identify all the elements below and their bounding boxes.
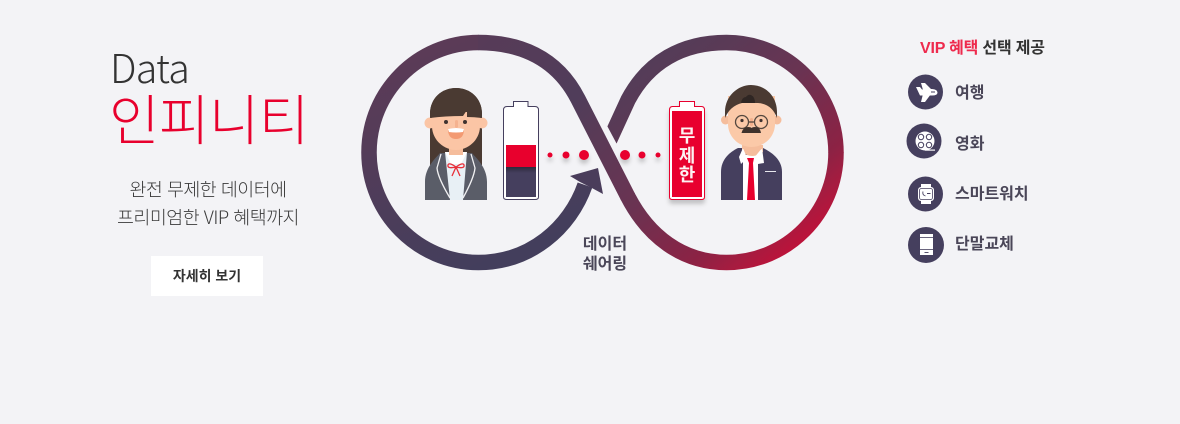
woman figure xyxy=(424,88,488,200)
jacket xyxy=(425,153,487,200)
button: 자세히 보기: 자세히 보기 xyxy=(173,268,241,284)
label: 데이터 쉐어링: 쉐어링 xyxy=(583,256,627,273)
dotted connector xyxy=(548,150,660,160)
label: 데이터 쉐어링 xyxy=(583,235,627,273)
man figure xyxy=(721,85,782,200)
battery: unlimited xyxy=(670,102,704,200)
icon: film reel xyxy=(906,124,942,158)
battery label: 무 xyxy=(679,122,695,148)
icon: smartwatch xyxy=(908,176,943,212)
arrow head xyxy=(570,168,603,194)
text block: description: 완전 무제한 데이터에 xyxy=(129,176,287,202)
battery label: 제 xyxy=(679,142,695,168)
label: 데이터 쉐어링: 데이터 xyxy=(583,236,627,253)
list label: 스마트워치: 스마트워치 xyxy=(955,186,1029,203)
text block: description xyxy=(117,176,299,230)
battery: low xyxy=(504,102,538,200)
battery label: 한 xyxy=(679,161,696,187)
infinity diagram xyxy=(361,34,944,270)
infinity loop with arrow xyxy=(369,42,836,262)
text block: description: 프리미엄한 VIP 혜택까지 xyxy=(117,204,299,230)
heading: VIP 혜택 선택 제공: VIP 혜택 선택 제공 xyxy=(920,40,1045,57)
ribbon xyxy=(448,164,464,176)
icon: phone xyxy=(908,227,944,263)
icon: airplane xyxy=(908,74,943,110)
list label: 여행: 여행 xyxy=(955,85,984,102)
heading: 인피니티: 인피니티 xyxy=(109,76,309,156)
battery label xyxy=(679,122,696,187)
list label: 영화: 영화 xyxy=(955,136,984,153)
heading: Data: Data xyxy=(110,38,189,95)
button: 자세히 보기 xyxy=(151,256,263,296)
list label: 단말교체: 단말교체 xyxy=(955,236,1014,253)
